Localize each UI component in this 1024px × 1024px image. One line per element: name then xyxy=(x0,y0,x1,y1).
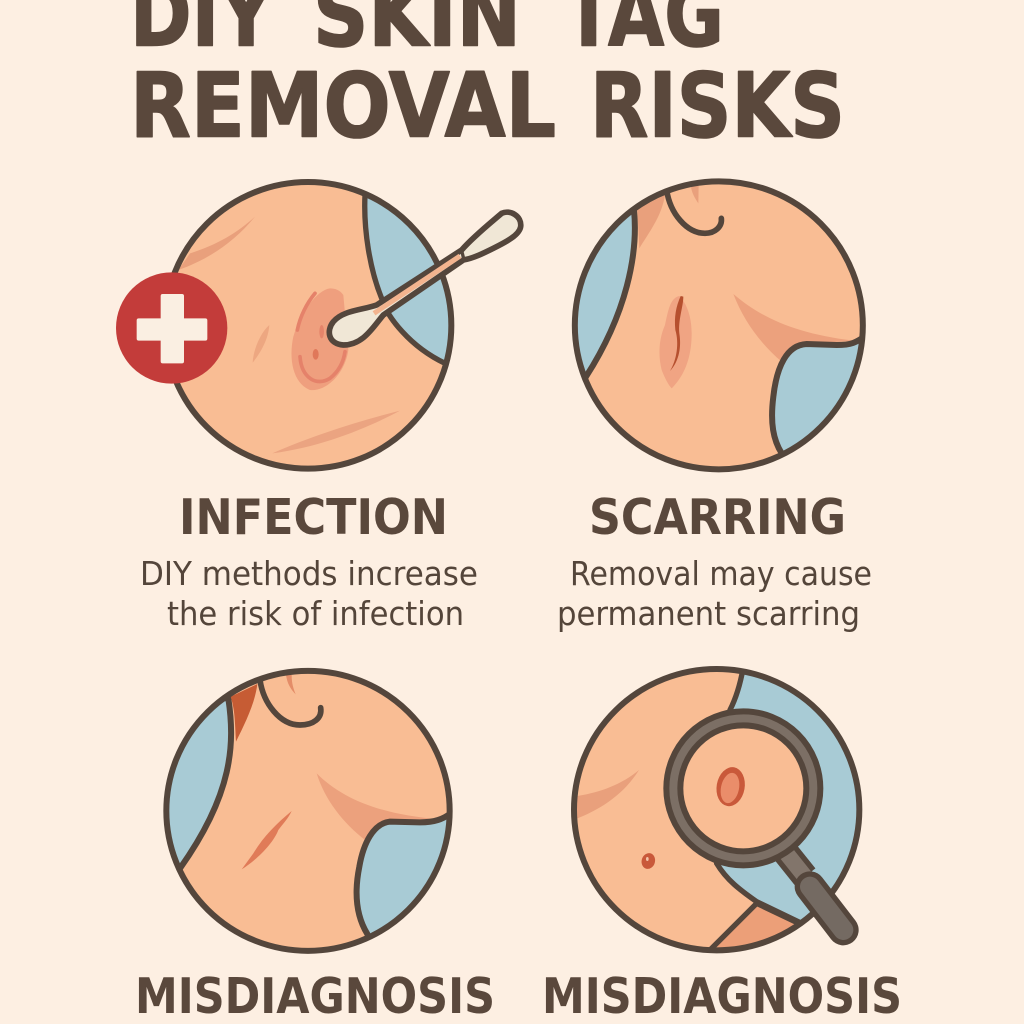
illustration: scarring xyxy=(572,178,866,472)
text: infection description: DIY methods increase xyxy=(140,554,478,593)
heading: scarring: SCARRING xyxy=(589,489,846,546)
text: scarring description xyxy=(557,554,872,633)
heading: infection: INFECTION xyxy=(179,489,448,546)
icon: magnifying glass xyxy=(666,711,843,930)
title: REMOVAL xyxy=(130,54,556,158)
illustration: misdiagnosis right xyxy=(573,667,880,953)
heading: misdiagnosis left: MISDIAGNOSIS xyxy=(135,968,495,1024)
title xyxy=(130,0,845,158)
text: infection description: the risk of infection xyxy=(167,594,464,633)
icon: cotton swab xyxy=(329,212,521,345)
text: scarring description: permanent scarring xyxy=(557,594,860,633)
illustration: infection xyxy=(165,182,477,469)
icon: medical cross badge xyxy=(116,272,227,384)
text: scarring description: Removal may cause xyxy=(570,554,872,593)
heading: misdiagnosis right: MISDIAGNOSIS xyxy=(542,968,902,1024)
text: infection description xyxy=(140,554,478,633)
illustration: misdiagnosis left xyxy=(163,668,453,954)
title: RISKS xyxy=(590,54,845,158)
